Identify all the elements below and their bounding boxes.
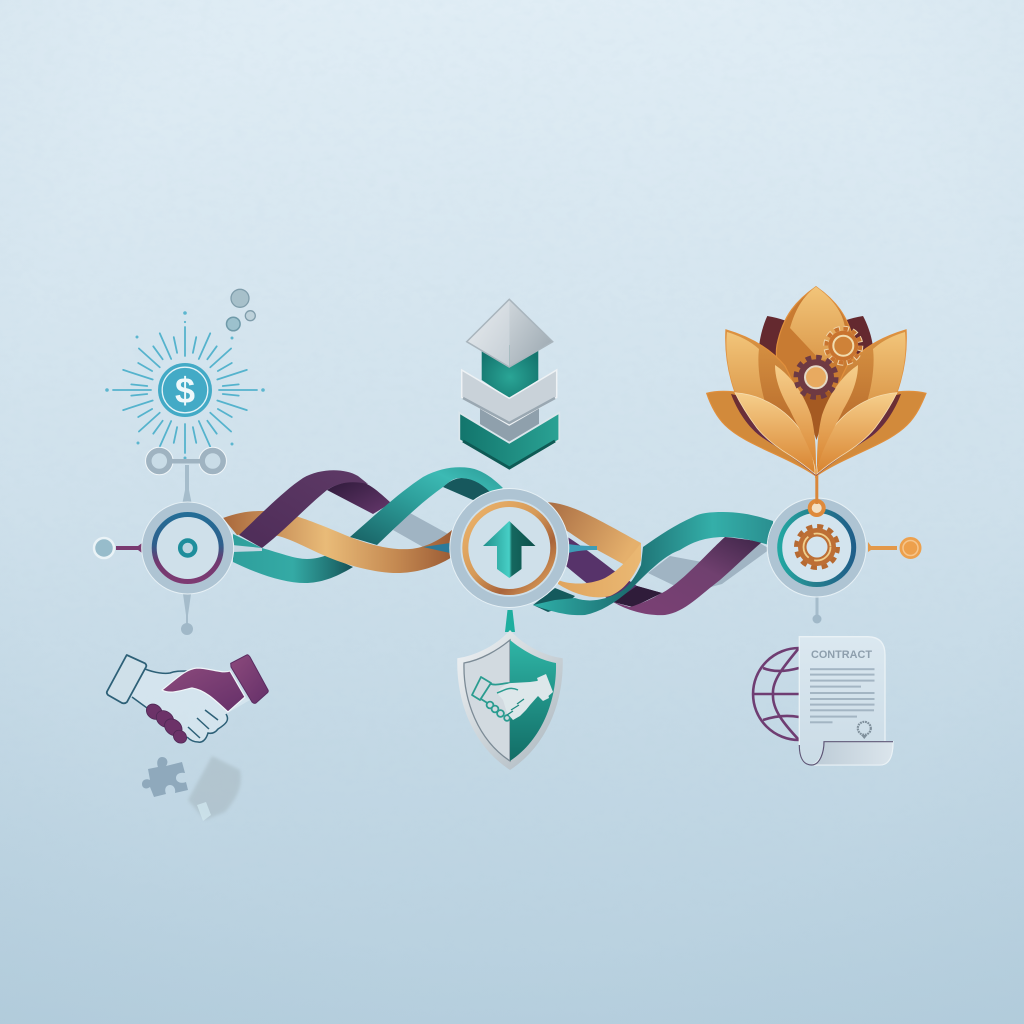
puzzle glow bbox=[197, 802, 211, 821]
icon: shield with handshake bbox=[457, 610, 563, 770]
grey block bbox=[480, 405, 539, 443]
node: right ring with gear bbox=[767, 498, 920, 624]
icon: bubbles bbox=[226, 289, 255, 331]
ribbon: teal upper band bbox=[350, 467, 503, 545]
stem bbox=[815, 474, 818, 504]
ribbon: purple dark fold bbox=[613, 586, 662, 607]
shield frame bbox=[457, 630, 563, 770]
node: left ring with purple pin bbox=[94, 465, 234, 635]
diamond right facet bbox=[509, 299, 553, 367]
shield right half bbox=[510, 640, 556, 761]
connector: blue stub bbox=[423, 543, 450, 553]
back purple petals bbox=[759, 316, 797, 390]
front left center petal bbox=[775, 365, 816, 470]
right hand of shield handshake bbox=[497, 674, 553, 720]
front right wide petal bbox=[817, 393, 897, 474]
intertwined ribbons: left section bbox=[223, 467, 503, 583]
contract title: CONTRACT bbox=[811, 649, 872, 661]
right pin bbox=[868, 542, 897, 552]
shield handshake bbox=[472, 677, 510, 721]
ribbon: teal dark fold bbox=[533, 588, 575, 612]
gradient ring bbox=[154, 514, 221, 582]
ribbon: teal lower band bbox=[233, 534, 353, 583]
pale hand bbox=[131, 669, 250, 742]
rays bbox=[113, 327, 257, 453]
teal block bbox=[482, 345, 538, 398]
ribbon: purple front band bbox=[239, 470, 368, 548]
ribbon: gold upper band bbox=[545, 502, 641, 570]
ribbon: grey segment right bbox=[648, 542, 770, 590]
outer ring bbox=[455, 494, 563, 602]
paper bbox=[799, 637, 893, 765]
top joint bbox=[810, 501, 824, 515]
connector: pale stub bbox=[232, 545, 262, 552]
gear bbox=[796, 526, 838, 568]
gold ring bbox=[465, 504, 553, 592]
ray end dots bbox=[105, 311, 265, 460]
icon: fading puzzle pieces bbox=[142, 756, 241, 821]
stem up bbox=[182, 465, 192, 505]
ribbon: purple back band bbox=[566, 536, 662, 607]
center petal bbox=[776, 287, 856, 430]
shield left half bbox=[464, 640, 510, 761]
scroll edge bbox=[799, 742, 893, 765]
icon: stacked upward chevrons bbox=[459, 299, 559, 468]
upper left petal bbox=[726, 330, 816, 476]
connector: blue stub bbox=[568, 544, 597, 553]
blue puzzle piece bbox=[142, 757, 188, 797]
icon: contract with globe bbox=[752, 637, 893, 765]
ribbon: teal front band bbox=[533, 512, 773, 615]
outer ring bbox=[773, 504, 861, 592]
ribbon: gold lower loop bbox=[558, 543, 641, 597]
seal bbox=[858, 722, 871, 739]
ribbon: gold band bbox=[223, 511, 452, 573]
grey chevron bbox=[462, 370, 557, 425]
front left wide petal bbox=[735, 393, 815, 474]
stem down bbox=[183, 594, 191, 626]
lower left petal bbox=[707, 391, 816, 476]
ribbon: teal back fold bbox=[443, 478, 500, 500]
ghost puzzle piece bbox=[188, 756, 241, 820]
diamond left facet bbox=[467, 299, 509, 367]
intertwined ribbons: right section bbox=[533, 502, 773, 615]
scroll fold bbox=[812, 742, 893, 765]
gradient ring bbox=[780, 510, 854, 584]
pale cuff bbox=[107, 655, 146, 703]
gear: orange bbox=[826, 329, 860, 363]
purple hand bbox=[162, 668, 245, 712]
upper right petal bbox=[816, 330, 906, 476]
gear: plum bbox=[796, 357, 836, 397]
purple cuff bbox=[231, 655, 268, 703]
globe bbox=[752, 648, 799, 740]
ribbon: purple back fold bbox=[327, 481, 391, 514]
stem down bbox=[816, 597, 818, 615]
arrow bbox=[483, 521, 536, 578]
icon: double ring connector bbox=[149, 450, 223, 472]
icon: handshake bbox=[107, 655, 268, 746]
outer ring bbox=[147, 507, 229, 589]
left pin bbox=[116, 543, 142, 553]
ribbon: grey segment left bbox=[393, 513, 452, 547]
center target bbox=[180, 540, 195, 556]
icon: dollar sunburst bbox=[105, 311, 265, 460]
dollar sign: $ bbox=[175, 370, 195, 411]
purple fingers bbox=[143, 701, 189, 746]
lower right petal bbox=[816, 391, 926, 476]
connector bbox=[505, 610, 515, 632]
icon: lotus with gears bbox=[707, 287, 926, 504]
teal chevron bbox=[459, 413, 559, 468]
center shadow bbox=[800, 389, 832, 440]
coin bbox=[158, 363, 212, 417]
front right center petal bbox=[817, 365, 858, 470]
contract text lines bbox=[810, 668, 874, 723]
ribbon: purple front band bbox=[613, 537, 762, 615]
node: center ring with up arrow bbox=[450, 488, 569, 608]
